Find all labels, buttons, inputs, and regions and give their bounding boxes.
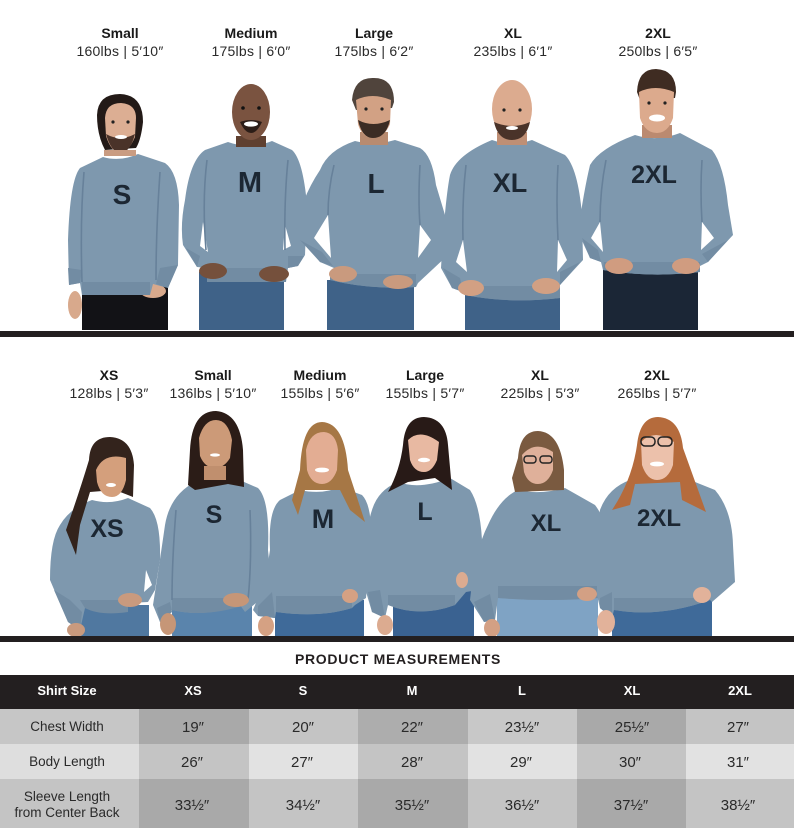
size label: women XL [500,367,580,401]
row: body length: Body Length [29,754,105,769]
model: woman large [364,417,482,636]
size label: women medium [280,367,360,401]
model: man 2XL [578,69,733,330]
model: man medium: M [238,167,262,199]
size label: men medium: Medium [225,25,277,41]
row: sleeve length: 38½″ [721,797,756,814]
row: chest width [0,709,794,744]
header row: M [407,683,417,698]
row: chest width: 20″ [292,719,315,736]
size label: men XL: 235lbs | 6′1″ [473,43,553,59]
model: woman small: S [206,501,222,529]
size label: men small: 160lbs | 5′10″ [76,43,164,59]
size label: women XS: XS [100,367,118,383]
model: man large [296,78,451,330]
header row [0,675,794,709]
size label: women XS: 128lbs | 5′3″ [69,385,149,401]
size label: women XL: XL [531,367,549,383]
model: woman XS: XS [90,515,124,543]
size label: men large: Large [355,25,393,41]
row: sleeve length: 36½″ [505,797,540,814]
size label: women small: Small [194,367,232,383]
row: body length: 27″ [291,754,314,771]
table title: PRODUCT MEASUREMENTS [295,651,501,667]
size label: men large [334,25,414,59]
size label: men medium [211,25,291,59]
row: sleeve length [0,779,794,828]
size label: men 2XL: 250lbs | 6′5″ [618,43,698,59]
header row: L [518,683,526,698]
divider bar: women [0,636,794,642]
model: man XL [441,80,583,330]
size label: women medium: 155lbs | 5′6″ [280,385,360,401]
model: man small: S [113,179,131,210]
size label: women XS [69,367,149,401]
size label: men 2XL: 2XL [645,25,671,41]
size label: women 2XL: 2XL [644,367,670,383]
size label: women XL: 225lbs | 5′3″ [500,385,580,401]
header row: S [299,683,308,698]
model: woman large: L [417,498,433,526]
size label: women small [169,367,257,401]
header row: Shirt Size [37,683,97,698]
divider bar: men [0,331,794,337]
row: sleeve length: 34½″ [286,797,321,814]
row: chest width: 19″ [182,719,205,736]
size label: men medium: 175lbs | 6′0″ [211,43,291,59]
row: sleeve length: Sleeve Length [24,789,110,804]
model: woman medium: M [312,504,334,534]
model: woman 2XL [597,417,735,636]
size label: men XL: XL [504,25,522,41]
model: man XL: XL [493,168,527,198]
model: woman small [153,411,272,636]
row: chest width: Chest Width [30,719,104,734]
row: body length: 29″ [510,754,533,771]
row: body length: 28″ [401,754,424,771]
row: body length: 26″ [181,754,204,771]
size label: women 2XL [617,367,697,401]
row: chest width: 27″ [727,719,750,736]
measurement table [0,675,794,828]
model: man small [68,94,179,330]
model: man 2XL: 2XL [631,161,677,189]
size label: men small [76,25,164,59]
model: woman XL [470,431,615,637]
model: woman XL: XL [531,510,561,537]
size label: men XL [473,25,553,59]
size label: women large [385,367,465,401]
row: chest width: 25½″ [615,719,650,736]
row: sleeve length: 33½″ [175,797,210,814]
size label: women 2XL: 265lbs | 5′7″ [617,385,697,401]
size label: women large: 155lbs | 5′7″ [385,385,465,401]
row: chest width: 23½″ [505,719,540,736]
header row: 2XL [728,683,752,698]
model: man medium [182,84,307,330]
row: body length: 31″ [727,754,750,771]
model: man large: L [367,168,385,199]
model: woman medium [253,422,371,636]
size label: men 2XL [618,25,698,59]
row: sleeve length: from Center Back [14,805,120,820]
size label: men large: 175lbs | 6′2″ [334,43,414,59]
row: sleeve length: 35½″ [395,797,430,814]
row: body length [0,744,794,779]
header row: XS [184,683,202,698]
model: woman XS [50,437,160,637]
size label: men small: Small [101,25,139,41]
row: body length: 30″ [619,754,642,771]
row: chest width: 22″ [401,719,424,736]
size label: women medium: Medium [294,367,346,383]
size label: women small: 136lbs | 5′10″ [169,385,257,401]
model: woman 2XL: 2XL [637,505,681,532]
row: sleeve length: 37½″ [614,797,649,814]
size label: women large: Large [406,367,444,383]
header row: XL [624,683,640,698]
